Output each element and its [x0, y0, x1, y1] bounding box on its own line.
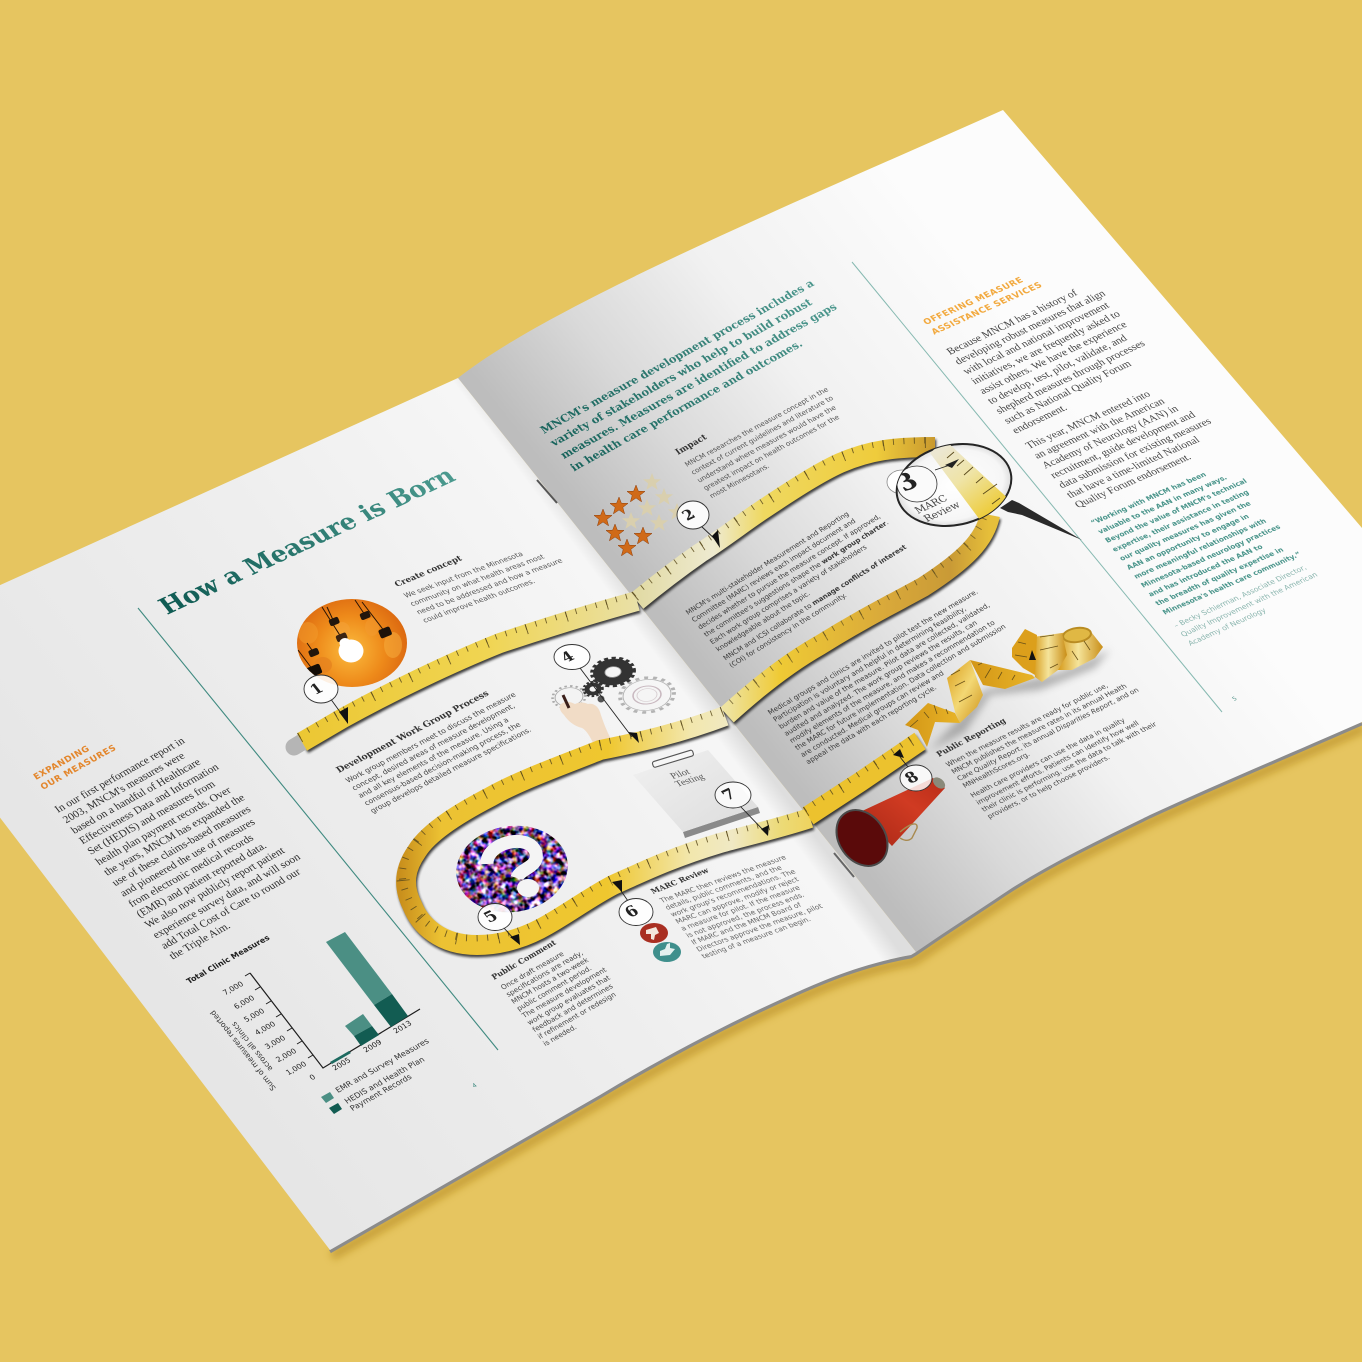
step text: development work group process: concept, desired areas of measure development, [350, 702, 517, 792]
illustration: gears and hand [551, 656, 676, 745]
step text: MARC review: is not approved, the process ends. [684, 891, 806, 939]
step text: pilot testing: Participation is voluntary and helpful in determining feasibility, [771, 604, 968, 724]
ribbon ring [1062, 626, 1092, 644]
y axis title: across all clinics [230, 1020, 274, 1073]
x axis labels: 2009 [361, 1038, 384, 1054]
title: How a Measure is Born [153, 461, 461, 620]
step marker 7: 7 [718, 785, 740, 804]
quote: Beyond the value of MNCM's technical [1103, 477, 1249, 545]
step text: public reporting: providers, or to help choose providers. [986, 754, 1112, 820]
step text: MARC review: The MARC then reviews the measure [657, 853, 789, 905]
step text: MARC review: testing of a measure can begin. [700, 915, 813, 960]
text: left column body: from electronic medical records [126, 832, 256, 910]
lens contents: Review [922, 500, 963, 525]
step text: development work group process: consensus-based decision-making process, the [362, 720, 523, 807]
x axis labels: 2013 [391, 1019, 414, 1035]
step text: public reporting: Public Reporting [934, 715, 1008, 759]
quote: our quality measures has given the [1117, 499, 1253, 562]
lens contents [897, 445, 1006, 522]
step text: public comment [490, 937, 630, 1048]
quote attribution: – Becky Schierman, Associate Director, [1172, 563, 1308, 630]
text: left column body: 2003, MNCM's measures were [61, 750, 187, 826]
step text: development work group process: group develops detailed measure specifications. [368, 726, 533, 815]
step text: public reporting: When the measure results are ready for public use, [944, 682, 1110, 769]
legend: EMR and Survey Measures [334, 1037, 431, 1095]
ribbon middle band [970, 660, 1035, 689]
step text: create concept: We seek input from the Minnesota [402, 550, 525, 600]
heading: offering measure assistance services: OFFERING MEASURE [922, 276, 1026, 327]
lens glass [889, 434, 1019, 536]
text: right column paragraph one: with local and national improvement [961, 300, 1112, 377]
ribbon far band [1058, 628, 1103, 670]
quote: more meaningful relationships with [1132, 517, 1268, 580]
handle [1000, 500, 1082, 540]
text: left column body: We also now publicly report patient [142, 845, 287, 931]
ribbon centre band [1033, 633, 1067, 682]
step marker 4: 4 [557, 648, 578, 666]
step text: impact: MNCM researches the measure concept in the [683, 386, 830, 469]
step text: pilot testing: modify elements of the measure, and makes a recommendation to [787, 618, 997, 745]
step text: MARC review: If MARC and the MNCM Board of [689, 900, 803, 946]
step text: pilot testing: the MARC for future implementation. Data collection and submission [793, 622, 1007, 752]
page edge thickness [330, 724, 1362, 1252]
bar chart: total clinic measures [185, 932, 432, 1114]
y axis values: 7,000 [221, 979, 245, 997]
horn [860, 778, 945, 846]
step text: create concept: community on what health areas most [408, 552, 546, 608]
step text: pilot testing: audited and analyzed. The work group reviews the results, can [782, 618, 979, 738]
text: left column body: (EMR) and patient reported data. [134, 840, 269, 920]
quote: AAN an opportunity to engage in [1125, 512, 1251, 571]
brochure shadow [332, 728, 1362, 1256]
step text: public reporting: their clinic is performing, use the data to talk with their [980, 721, 1158, 813]
quote: Minnesota's health care community.” [1160, 550, 1303, 616]
y axis values: 6,000 [232, 993, 256, 1011]
ribbon ticks [910, 635, 1090, 727]
mouthpiece [931, 775, 947, 791]
step text: development work group process: Work group members meet to discuss the measure [344, 690, 518, 785]
step text: MARC review: Directors approve the measure, pilot [694, 902, 824, 953]
text: right column paragraph one: endorsement. [1010, 402, 1070, 436]
step text: public comment: work group evaluates that [525, 973, 612, 1027]
text: right column paragraph two: an agreement with the American [1031, 396, 1168, 461]
text: left column body: health plan payment records. Over [93, 785, 234, 868]
right column divider [852, 262, 1222, 712]
quote attribution: Quality Improvement with the American [1179, 570, 1320, 639]
step text: impact: Impact [674, 433, 709, 457]
step text: public reporting: Care Quality Report, its annual Disparities Report, and on [955, 686, 1141, 783]
text: left column body: add Total Cost of Care to round our [159, 866, 303, 952]
bar 2005 [330, 1051, 351, 1064]
heading: expanding our measures: EXPANDING [32, 744, 92, 782]
step text: MARC review: details, public comments, and the [663, 863, 784, 912]
step marker 6 [612, 880, 653, 926]
thumbs up [653, 942, 681, 962]
clipboard: pilot testing: Testing [673, 772, 707, 789]
step marker 8 [893, 749, 932, 791]
step text: public reporting [934, 672, 1171, 820]
step text: public comment: is needed. [541, 1023, 578, 1048]
heading: expanding our measures: OUR MEASURES [39, 743, 119, 792]
crowd question mark [456, 826, 568, 912]
lead paragraph: variety of stakeholders who help to build robust [547, 296, 816, 449]
lens contents: MARC [913, 494, 950, 516]
clipboard: pilot testing: Pilot [668, 767, 693, 781]
magnifying glass [887, 434, 1082, 540]
text: left column body: experience survey data, and will soon [151, 851, 303, 941]
step text: public comment: Public Comment [490, 938, 558, 982]
chart title: Total Clinic Measures [185, 933, 272, 986]
lead paragraph: in health care performance and outcomes. [568, 337, 805, 474]
step text: MARC review: a measure for pilot. If the measure [679, 883, 802, 932]
lead paragraph: measures. Measures are identified to address gaps [558, 301, 840, 461]
step text: MARC review: MARC can approve, modify or reject [673, 875, 801, 925]
quote attribution: Academy of Neurology [1186, 606, 1268, 648]
text: right column paragraph one: developing robust measures that align [952, 288, 1109, 367]
text: left column body: and pioneered the use of measures [118, 816, 258, 899]
text: right column paragraph two: This year, MNCM entered into [1023, 389, 1153, 451]
step text: public comment: specifications are ready, [504, 948, 585, 999]
step text: public reporting: Health care providers can use the data in quality [969, 717, 1127, 799]
text: left column body: the Triple Aim. [167, 920, 233, 962]
step marker 4 [554, 644, 639, 743]
legend [321, 1037, 432, 1114]
step marker 7 [715, 782, 769, 836]
text: right column paragraph two: data submission for existing measures [1056, 416, 1214, 491]
quote: valuable to the AAN in many ways. [1096, 473, 1229, 536]
faint circle around step 3 [887, 470, 917, 494]
text: right column paragraph two: recruitment, guide development and [1048, 409, 1199, 481]
step marker 2: 2 [678, 506, 699, 524]
step text: impact: greatest impact on health outcomes for the [702, 413, 841, 492]
tape measure [294, 440, 991, 947]
thumbs icons [640, 923, 681, 962]
lens contents: 3 [890, 467, 924, 497]
y axis values: 1,000 [284, 1059, 308, 1077]
step marker 5: 5 [480, 907, 502, 926]
step marker 8: 8 [901, 768, 923, 787]
tape segments [302, 447, 990, 945]
page number 5: 5 [1231, 695, 1239, 703]
text: right column paragraph two: Academy of Neurology (AAN) in [1040, 403, 1182, 471]
illustration: star rating [594, 473, 686, 556]
ribbon lower fold [905, 703, 960, 747]
text: left column body: Effectiveness Data and Information [77, 761, 222, 847]
step text: impact: context of current guidelines and literature to [689, 394, 835, 476]
staple bottom [834, 853, 854, 877]
step text: create concept: need to be addressed and how a measure [414, 556, 565, 616]
bar 2009 [345, 1014, 379, 1046]
step text: public comment: public comment period. [515, 964, 593, 1013]
step text: development work group process: Development Work Group Process [335, 689, 491, 775]
quote: Minnesota-based neurology practices [1139, 523, 1282, 589]
quote: the breadth of quality expertise in [1153, 545, 1285, 607]
step text: pilot testing: Medical groups and clinics are invited to pilot test the new measure. [766, 587, 980, 717]
step marker 5 [478, 904, 520, 945]
y axis values: 4,000 [253, 1019, 277, 1037]
step text: impact: most Minnesotans. [708, 462, 771, 500]
quote: expertise, their assistance in testing [1110, 488, 1251, 553]
step text: development work group process [335, 689, 543, 815]
text: left column body: Set (HEDIS) and measures from [85, 778, 218, 857]
quote: “Working with MNCM has been [1089, 470, 1208, 527]
quote: and has introduced the AAN to [1146, 542, 1265, 598]
legend: Payment Records [348, 1072, 414, 1113]
y axis ticks [245, 973, 313, 1058]
text: right column paragraph two: Quality Forum endorsement. [1072, 451, 1194, 510]
handle [900, 824, 917, 840]
left column divider [138, 608, 498, 1050]
panel: left page [0, 378, 916, 1250]
step text: MARC committee: decides whether to pursue the measure concept. If approved, [696, 513, 882, 631]
step text: public reporting: improvement efforts. Patients can identify how well [975, 720, 1141, 806]
step text: MARC review: MARC Review [649, 866, 711, 896]
text: left column body: In our first performance report in [52, 735, 188, 815]
text: right column paragraph one: initiatives, we are frequently asked to [969, 309, 1123, 387]
y axis title: Sum of measures reported [208, 1008, 278, 1093]
step text: public reporting: MNCM publishes the measure rates in its annual Health [950, 682, 1129, 776]
heading: offering measure assistance services: ASSISTANCE SERVICES [930, 281, 1045, 337]
step text: public reporting: MNHealthScores.org. [961, 751, 1032, 790]
text: right column paragraph one: such as National Quality Forum [1002, 358, 1134, 426]
clipboard: pilot testing [633, 750, 760, 838]
text: right column paragraph one: shepherd measures through processes [993, 338, 1148, 416]
thumbs down [640, 923, 668, 943]
page number 4: 4 [471, 1082, 479, 1090]
y axis values: 3,000 [263, 1033, 287, 1051]
step text: pilot testing: appeal the data with each reporting cycle. [804, 683, 938, 766]
step text: MARC committee: Committee (MARC) reviews each impact document and [690, 517, 857, 624]
step text: pilot testing: burden and value of the measure. Pilot data are collected, validated, [777, 601, 992, 731]
text: right column paragraph one: assist others. We have the experience [977, 319, 1130, 397]
step text: impact: understand where measures would have the [696, 404, 838, 484]
bell [826, 800, 898, 876]
y axis values: 5,000 [242, 1006, 266, 1024]
step text: create concept: could improve health outcomes. [421, 577, 537, 624]
legend: HEDIS and Health Plan [343, 1055, 426, 1106]
text: right column paragraph one: to develop, test, pilot, validate, and [985, 332, 1130, 407]
step text: public comment: if refinement or redesign [536, 990, 618, 1041]
step text: MARC committee: MNCM and ICSI collaborate to manage conflicts of interest [722, 543, 908, 662]
step text: impact [674, 386, 855, 500]
bar 2013 [326, 932, 408, 1027]
y axis values: 0 [308, 1072, 317, 1082]
step text: MARC committee: Each work group comprises a variety of stakeholders [708, 543, 869, 646]
tape ribbon twist [905, 626, 1110, 750]
x axis labels [330, 1019, 414, 1072]
step text: public comment: Once draft measure [499, 949, 566, 992]
text: right column paragraph two: that have a time-limited National [1064, 434, 1202, 501]
tape metal end [294, 741, 304, 747]
x axis labels: 2005 [330, 1056, 353, 1072]
text: right column paragraph one: Because MNCM has a history of [944, 287, 1080, 357]
tape shadow [303, 449, 991, 947]
step text: MARC committee: the committee's suggestions shape the work group charter. [702, 519, 890, 639]
step text: MARC committee: knowledgeable about the topic. [714, 590, 812, 653]
megaphone [826, 775, 947, 876]
step text: public comment: The measure development [519, 965, 608, 1020]
text: left column body: the years, MNCM has expanded the [102, 792, 247, 878]
step text: MARC committee: MNCM's multi-stakeholder Measurement and Reporting [684, 510, 851, 617]
step text: pilot testing: are conducted. Medical groups can review and [798, 669, 946, 759]
ribbon upper fold [947, 660, 983, 723]
panel: right page [458, 110, 1362, 952]
y axis values: 2,000 [274, 1046, 298, 1064]
lead paragraph: MNCM's measure development process includes a [538, 277, 817, 436]
text: left column body: use of these claims-based measures [110, 804, 253, 889]
step marker 1 [304, 675, 348, 724]
step text: create concept: Create concept [392, 553, 464, 589]
text: left column body: based on a handful of Healthcare [69, 756, 203, 836]
tape ticks [298, 440, 987, 940]
illustration: light bulbs [297, 599, 407, 687]
staple top [537, 480, 557, 503]
step text: public comment: feedback and determines [530, 982, 615, 1034]
y axis values [221, 979, 317, 1082]
step marker 2 [677, 501, 720, 548]
step marker 1: 1 [306, 680, 327, 698]
step text: MARC review: work group's recommendations. The [668, 867, 798, 919]
step text: development work group process: and all key elements of the measure. Using a [356, 716, 511, 800]
step text: MARC review [649, 853, 830, 961]
step text: MARC committee: (COI) for consistency in the community. [728, 592, 848, 669]
ribbon shadow [930, 650, 1110, 750]
step marker 6: 6 [621, 902, 643, 921]
step text: create concept [392, 540, 571, 624]
axes [250, 973, 420, 1068]
step text: public comment: MNCM hosts a two-week [509, 955, 591, 1006]
ribbon left lobe [1012, 629, 1037, 675]
